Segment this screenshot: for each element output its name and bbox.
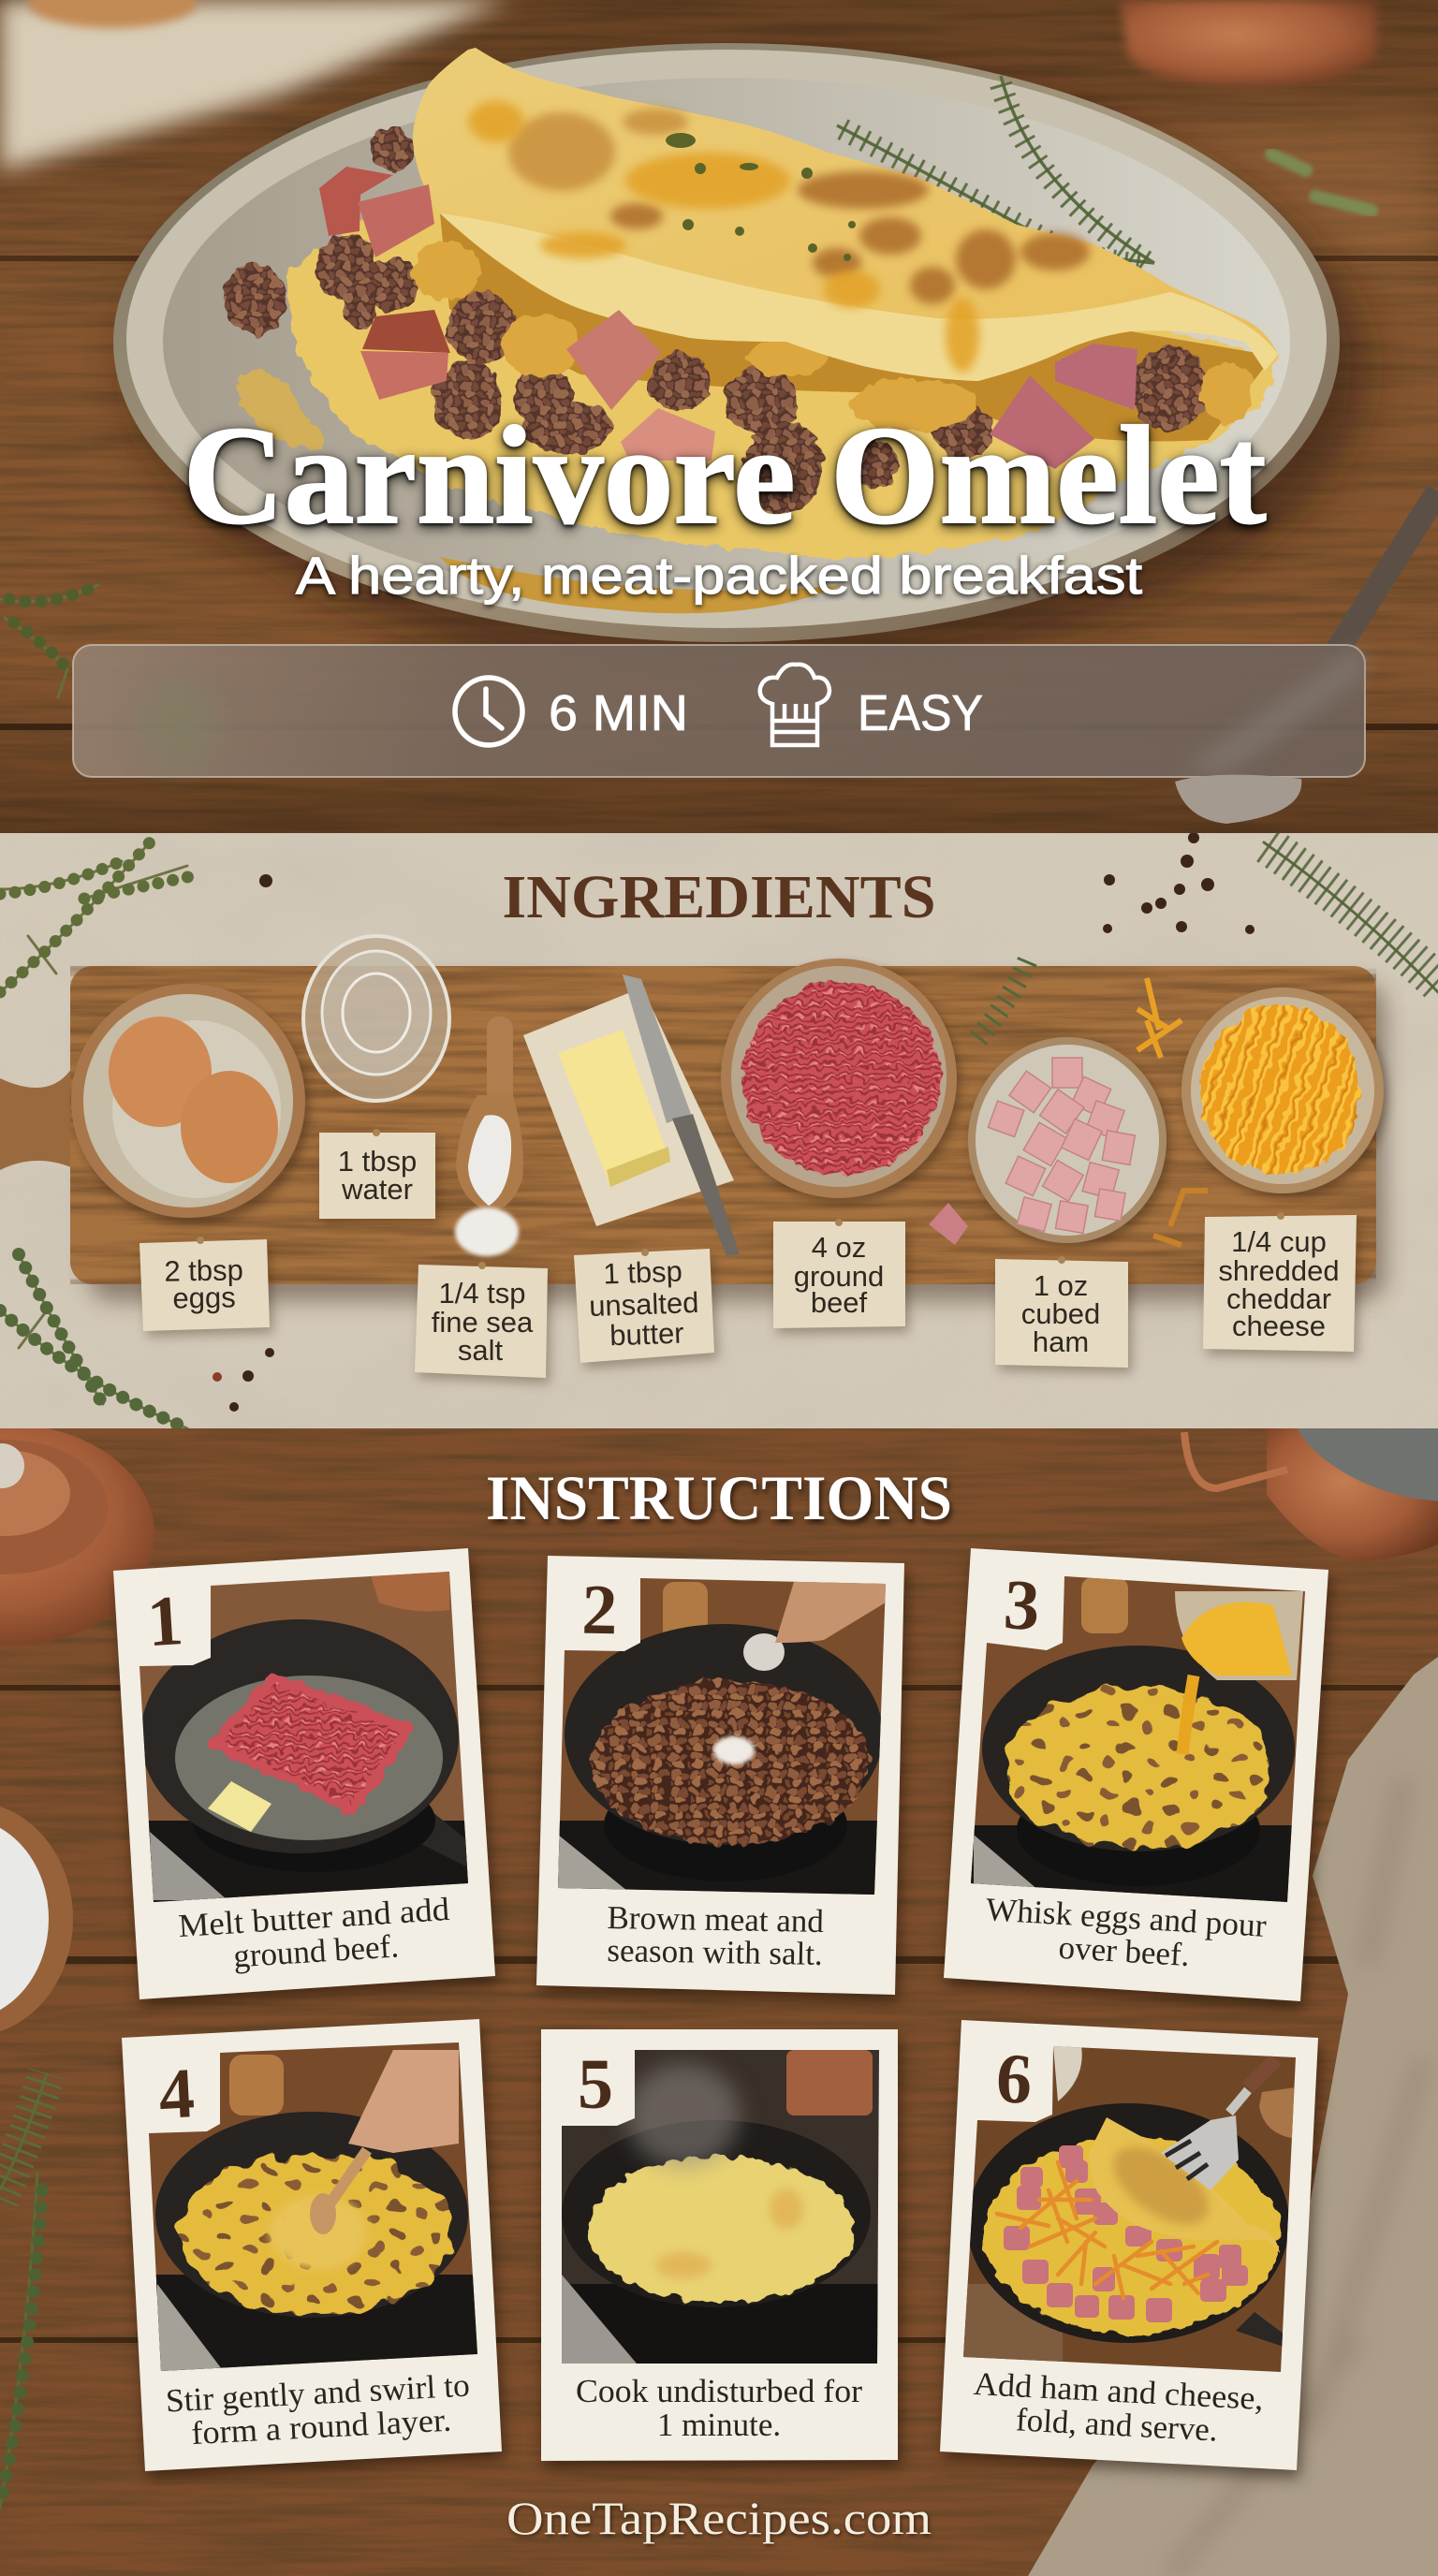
info bar: [73, 645, 1365, 777]
time label: 6 MIN: [549, 685, 688, 741]
loose cheddar and ham: [929, 978, 1208, 1245]
note: ground beef: ground: [794, 1260, 884, 1293]
step card 4: [122, 2019, 502, 2471]
number tab 3: 3: [1002, 1565, 1042, 1646]
note: salt: fine sea: [432, 1306, 534, 1339]
photo 2: [552, 1573, 889, 1900]
number tab 4: 4: [157, 2054, 197, 2134]
note: cheddar: shredded: [1218, 1254, 1340, 1287]
photo 3: [964, 1573, 1311, 1905]
spoon bowl: [1175, 775, 1301, 824]
caption 3: [983, 1891, 1268, 1978]
note: water: [319, 1129, 435, 1219]
melted cheese: [413, 241, 1253, 431]
rosemary garnish: [837, 76, 1154, 267]
caption 4: Stir gently and swirl to: [165, 2367, 471, 2419]
number tab 6: 6: [994, 2039, 1034, 2119]
note: ham: 1 oz: [1034, 1269, 1088, 1302]
caption 6: fold, and serve.: [1015, 2401, 1219, 2449]
rosemary sprig: [978, 955, 1030, 1039]
caption 5: Cook undisturbed for: [576, 2373, 862, 2409]
browned spots: [610, 171, 1090, 304]
cloth: [0, 0, 510, 170]
fork handle: [1334, 491, 1438, 655]
note: ground beef: beef: [811, 1286, 868, 1319]
footer website: OneTapRecipes.com: [506, 2492, 932, 2544]
caption 4: [165, 2367, 472, 2452]
caption 1: ground beef.: [232, 1927, 400, 1974]
note: butter: [574, 1249, 714, 1363]
caption 3: Whisk eggs and pour: [985, 1891, 1268, 1944]
bowl: shredded cheddar: [1181, 988, 1387, 1199]
number tab 2: 2: [581, 1571, 618, 1649]
step card 1: [113, 1548, 495, 1999]
note: cheddar: cheddar: [1226, 1282, 1331, 1315]
thyme sprig, left: [0, 585, 98, 697]
icon: clock: [455, 678, 522, 745]
caption 2: Brown meat and: [607, 1899, 825, 1939]
bowl: eggs: [71, 984, 310, 1225]
number tab 5: 5: [578, 2045, 613, 2124]
note: 2 tbsp eggs: eggs: [172, 1281, 236, 1315]
photo 6: [960, 2041, 1301, 2378]
note: butter: 1 tbsp: [603, 1255, 682, 1290]
step card 6: [940, 2020, 1318, 2470]
icon: chef hat: [760, 665, 829, 745]
note: cheddar: [1203, 1212, 1357, 1352]
subtitle: A hearty, meat-packed breakfast: [296, 546, 1142, 605]
butter knife: [623, 974, 740, 1256]
lower omelet layer: [288, 197, 1278, 558]
caption 1: [177, 1891, 453, 1978]
note: 2 tbsp eggs: [139, 1237, 270, 1331]
salt bowl: [0, 1802, 73, 2036]
difficulty label: EASY: [858, 685, 983, 741]
linen towel: [1028, 1657, 1438, 2576]
note: cheddar: cheese: [1232, 1310, 1326, 1342]
note: butter: unsalted: [589, 1286, 699, 1323]
step card 2: [536, 1556, 904, 1995]
copper pot: [1120, 0, 1376, 86]
note: ground beef: 4 oz: [812, 1231, 866, 1264]
title: Carnivore Omelet: [183, 398, 1267, 553]
note: ham: ham: [1033, 1325, 1089, 1358]
note: salt: salt: [458, 1334, 504, 1367]
ingredients heading: INGREDIENTS: [502, 863, 936, 931]
caption 5, line 2: 1 minute.: [657, 2407, 781, 2443]
copper lid: [0, 1425, 154, 1646]
bowl: ground beef: [721, 959, 961, 1204]
melted cheese under fold: [440, 213, 1273, 441]
caption 4: form a round layer.: [190, 2402, 452, 2452]
herbs: left: [0, 2073, 47, 2509]
caption 2: [607, 1899, 825, 1972]
butter on paper: [523, 988, 734, 1226]
egg shells in the background: [28, 0, 197, 28]
photo 5: [557, 2045, 885, 2368]
upper fold: [413, 48, 1278, 381]
caption 6: Add ham and cheese,: [973, 2365, 1265, 2417]
note: 2 tbsp eggs: 2 tbsp: [164, 1253, 243, 1288]
photo 4: [140, 2036, 487, 2378]
cutting board: [0, 966, 1386, 1301]
copper pot: [1184, 1338, 1438, 1561]
note: water: 1 tbsp: [338, 1145, 417, 1178]
step card 5: [541, 2029, 898, 2461]
note: butter: butter: [609, 1317, 684, 1352]
peppercorns: [213, 832, 1255, 1412]
omelet: [224, 48, 1278, 613]
note: ham: cubed: [1021, 1297, 1100, 1330]
note: ham: [995, 1256, 1128, 1368]
caption 6: [971, 2365, 1265, 2451]
photo 1: [131, 1563, 477, 1910]
plate: [113, 43, 1367, 671]
panel: hero: [0, 0, 1438, 833]
ground beef filling: [224, 126, 1209, 515]
caption 3: over beef.: [1058, 1929, 1191, 1973]
ham cubes: [319, 167, 1137, 469]
note: water: water: [341, 1173, 413, 1206]
herb flakes: [666, 133, 856, 261]
panel: ingredients: [0, 832, 1438, 1428]
caption 2: season with salt.: [607, 1932, 823, 1972]
caption 1: Melt butter and add: [177, 1891, 451, 1944]
glass of water: [303, 936, 449, 1101]
herb sprig, right: [1271, 154, 1372, 211]
herbs: corners: [0, 842, 1438, 1428]
note: salt: 1/4 tsp: [438, 1277, 526, 1310]
plate: cubed ham: [968, 1037, 1170, 1249]
instructions heading: INSTRUCTIONS: [486, 1462, 952, 1533]
scoop of salt: [455, 1017, 523, 1256]
note: salt: [415, 1262, 548, 1378]
note: cheddar: 1/4 cup: [1231, 1225, 1327, 1258]
note: ground beef: [773, 1219, 905, 1328]
step card 3: [944, 1548, 1328, 2001]
number tab 1: 1: [145, 1581, 185, 1661]
panel: instructions: [0, 1338, 1438, 2576]
